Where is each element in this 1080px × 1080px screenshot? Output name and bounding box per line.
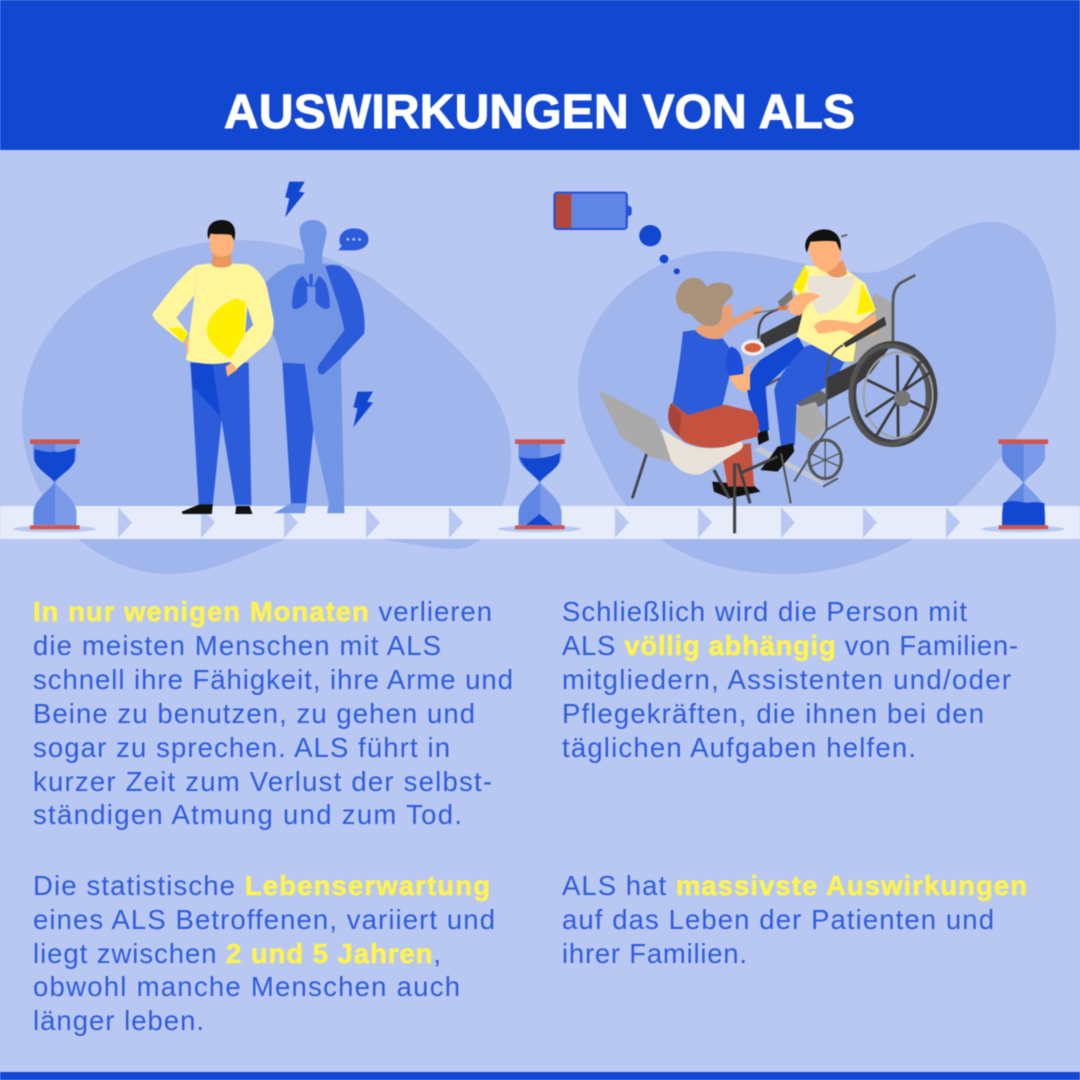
- illustration: caregiver feeding person in wheelchair: [554, 193, 934, 533]
- header banner: [0, 0, 1080, 150]
- text block: loss of abilities: In nur wenigen Monaten verlieren: [33, 596, 492, 627]
- text block: loss of abilities: ständigen Atmung und zum Tod.: [33, 799, 462, 830]
- background blob right: [578, 222, 1056, 574]
- chair and caregiver woman: [599, 278, 778, 533]
- text block: dependence: ALS völlig abhängig von Familien-: [562, 630, 1018, 661]
- text block: loss of abilities: die meisten Menschen mit ALS: [33, 630, 441, 661]
- text block: dependence: Pflegekräften, die ihnen bei den: [562, 698, 984, 729]
- text block: life expectancy: länger leben.: [33, 1005, 204, 1036]
- small wheel: [809, 440, 841, 479]
- silhouette arm and leg: [282, 265, 365, 503]
- timeline band with chevrons: [0, 506, 1080, 539]
- text block: loss of abilities: sogar zu sprechen. ALS führt in: [33, 732, 450, 763]
- text block: massive impact: [562, 870, 1027, 969]
- text block: life expectancy: [33, 870, 495, 1036]
- icon: lungs: [292, 274, 330, 309]
- background blob left: [22, 240, 511, 574]
- wheelchair front frame and wheels: [781, 317, 934, 503]
- hourglass right: [982, 439, 1064, 532]
- hourglass left: [13, 439, 96, 532]
- icon: low battery: [554, 193, 632, 229]
- text block: life expectancy: obwohl manche Menschen auch: [33, 971, 460, 1002]
- text block: life expectancy: Die statistische Lebenserwartung: [33, 870, 490, 901]
- text block: loss of abilities: Beine zu benutzen, zu gehen und: [33, 698, 475, 729]
- text block: dependence: [562, 596, 1018, 763]
- big wheel: [851, 345, 934, 444]
- text block: loss of abilities: [33, 596, 513, 830]
- person in wheelchair: [747, 229, 876, 472]
- text block: loss of abilities: schnell ihre Fähigkeit, ihre Arme und: [33, 664, 513, 695]
- text block: dependence: Schließlich wird die Person mit: [562, 596, 967, 627]
- text block: massive impact: auf das Leben der Patienten und: [562, 904, 994, 935]
- text block: life expectancy: liegt zwischen 2 und 5 Jahren,: [33, 938, 441, 969]
- hourglass middle: [498, 439, 581, 532]
- text block: massive impact: ALS hat massivste Auswirkungen: [562, 870, 1027, 901]
- text block: dependence: täglichen Aufgaben helfen.: [562, 732, 916, 763]
- text block: dependence: mitgliedern, Assistenten und/oder: [562, 664, 1011, 695]
- text block: loss of abilities: kurzer Zeit zum Verlust der selbst-: [33, 766, 492, 797]
- icon: lightning bolt lower: [353, 392, 373, 427]
- icon: speech bubble: [338, 228, 369, 250]
- icon: lightning bolt upper: [285, 182, 305, 217]
- man figure: [152, 220, 274, 514]
- title: AUSWIRKUNGEN VON ALS: [224, 86, 855, 139]
- wheelchair back parts: [754, 275, 915, 487]
- text block: massive impact: ihrer Familien.: [562, 938, 747, 969]
- illustration: man and body silhouette: [152, 182, 373, 514]
- text block: life expectancy: eines ALS Betroffenen, variiert und: [33, 904, 495, 935]
- silhouette body: [265, 220, 345, 513]
- thought bubbles: [639, 225, 680, 274]
- footer bar: [0, 1072, 1080, 1080]
